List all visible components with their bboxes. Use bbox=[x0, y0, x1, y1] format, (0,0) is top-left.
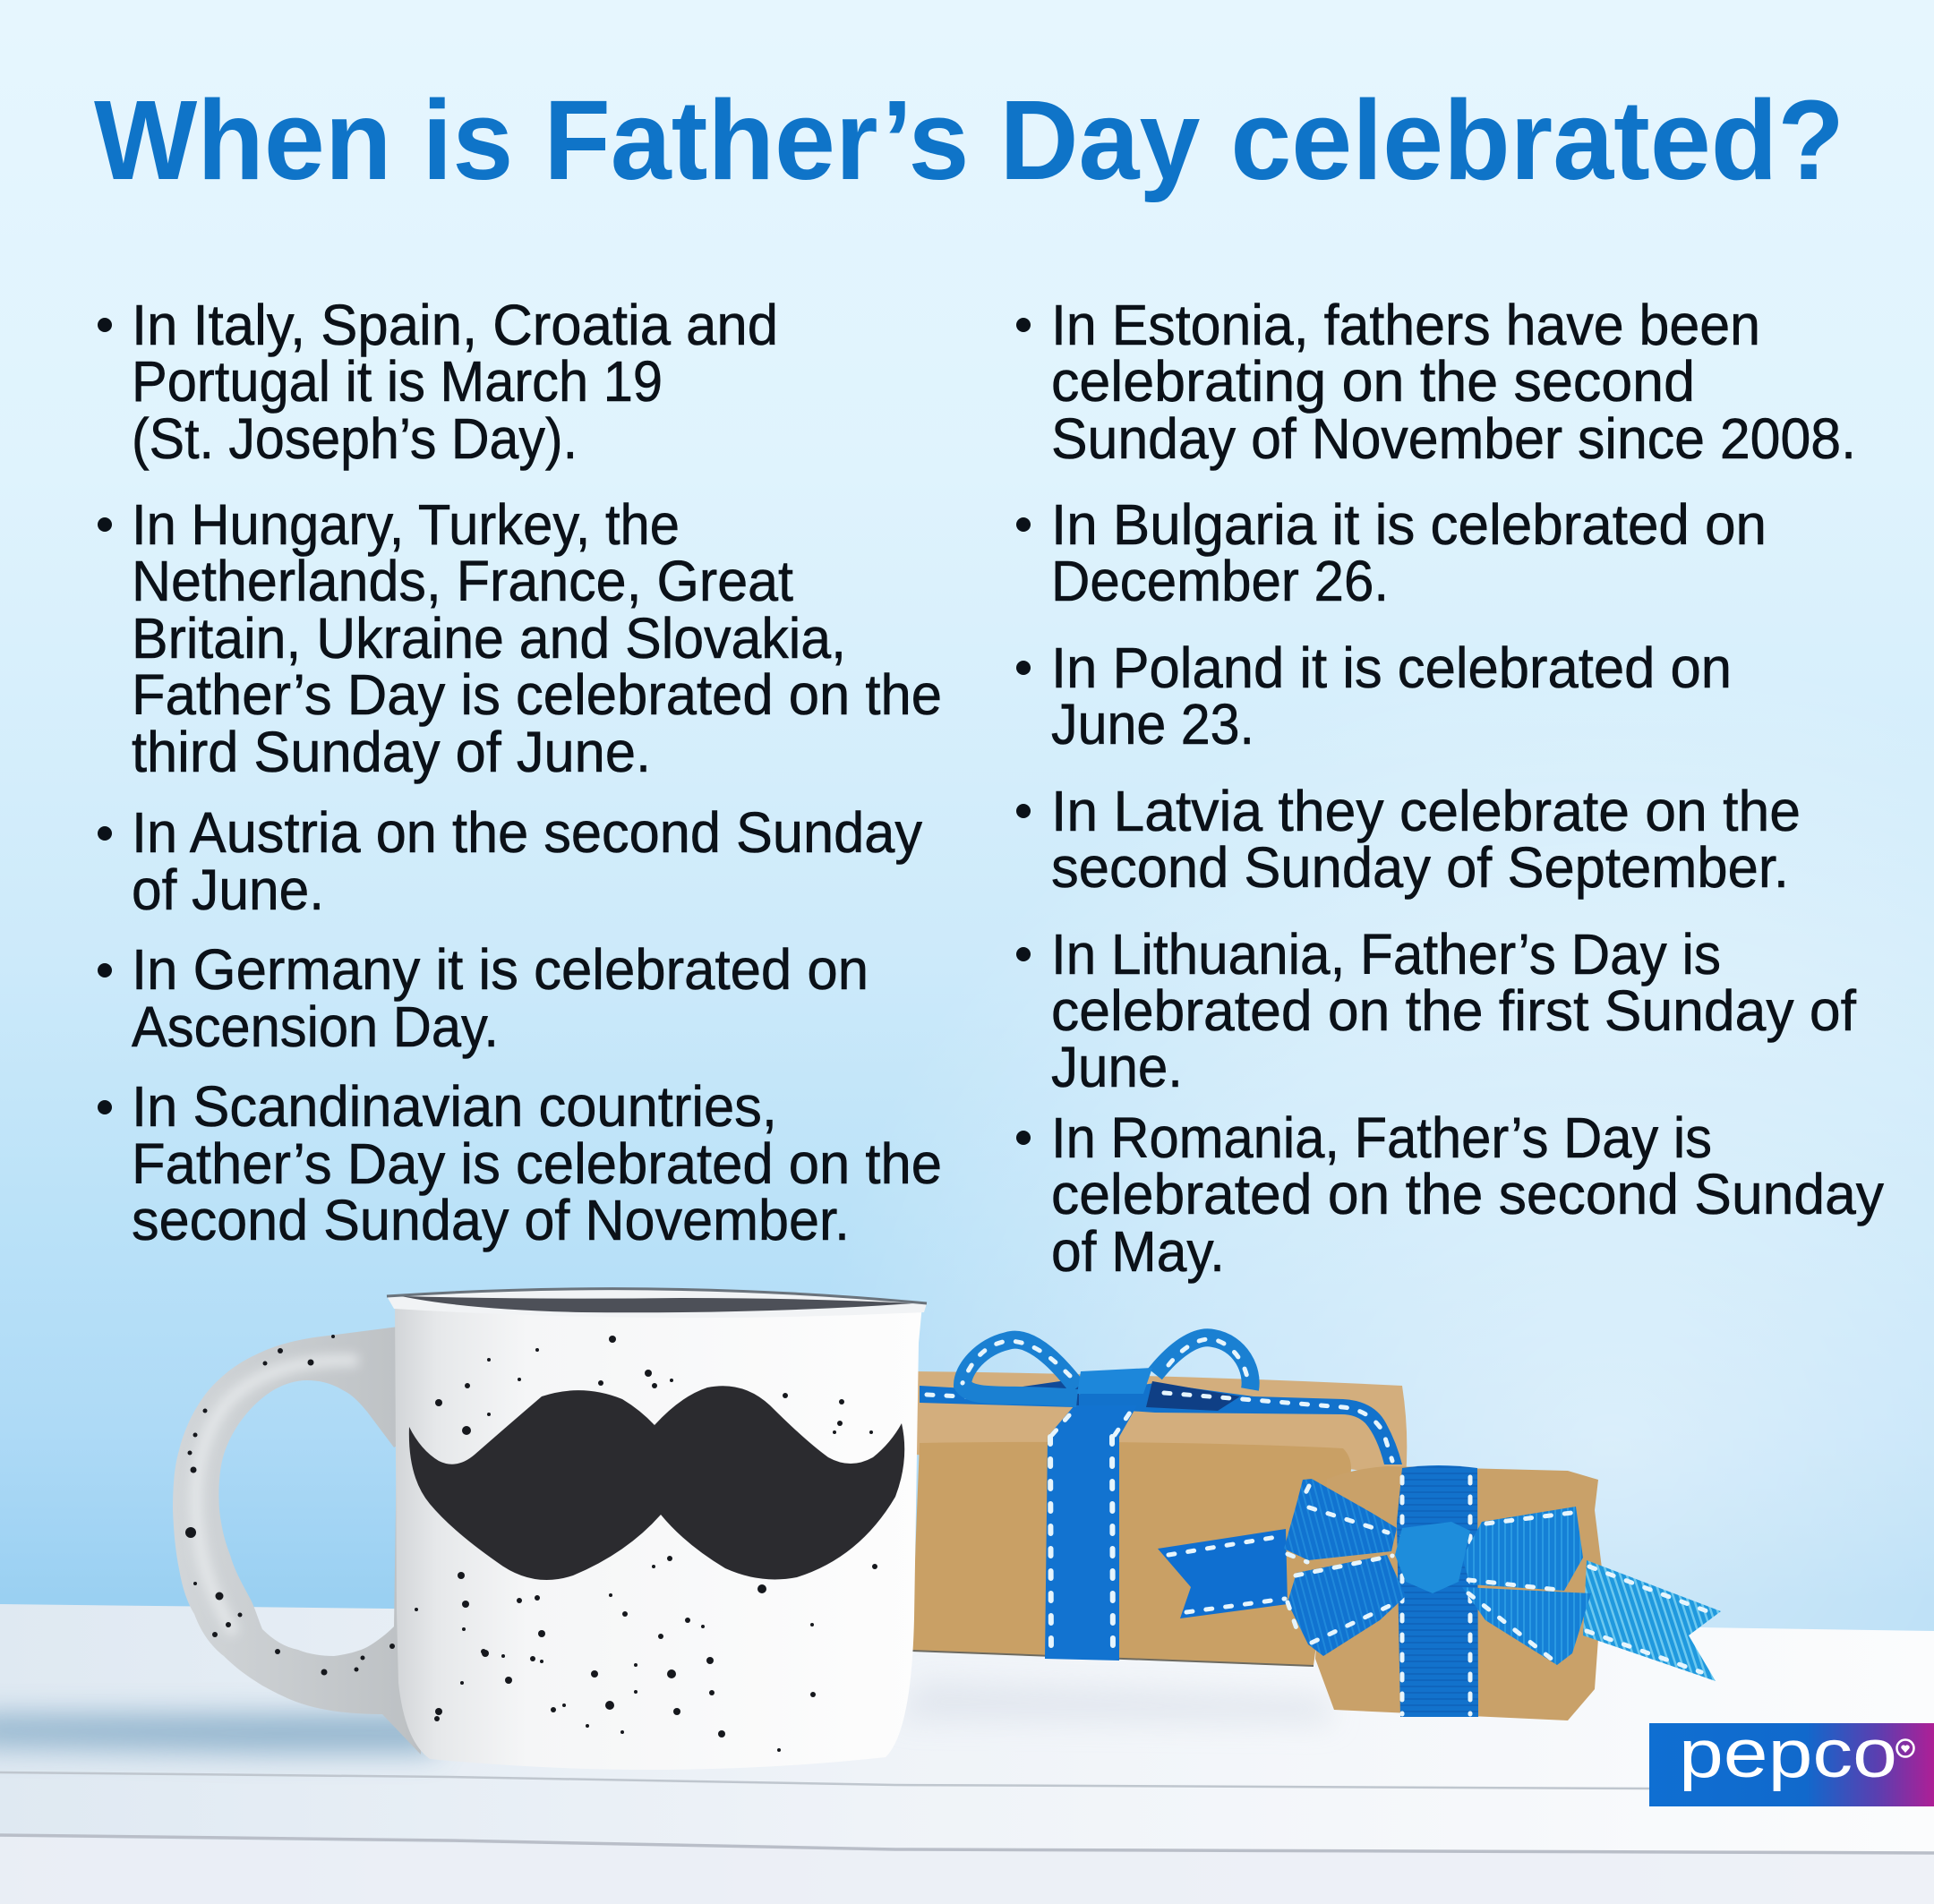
pepco logo bbox=[1649, 1716, 1934, 1806]
item: Austria bbox=[98, 800, 922, 922]
bow left bottom loop bbox=[1288, 1555, 1406, 1656]
item: Italy, Spain, Croatia, Portugal bbox=[98, 293, 778, 471]
title: When is Father’s Day celebrated? bbox=[94, 77, 1844, 203]
item: Germany: Ascension Day. bbox=[132, 995, 499, 1059]
large gift box bbox=[911, 1337, 1407, 1666]
item: Lithuania: celebrated on the first Sunday of bbox=[1051, 978, 1856, 1043]
item: Scandinavian countries: second Sunday of November. bbox=[132, 1188, 850, 1252]
ribbon vertical band bbox=[1045, 1405, 1137, 1661]
mug body bbox=[395, 1298, 922, 1770]
item: Austria: of June. bbox=[132, 858, 324, 922]
item: Scandinavian countries: Father’s Day is celebrated on the bbox=[132, 1131, 942, 1196]
item: Lithuania: June. bbox=[1051, 1035, 1183, 1099]
item: Poland: In Poland it is celebrated on bbox=[1051, 636, 1732, 700]
ribbon band across top bbox=[920, 1383, 1402, 1464]
item: Poland bbox=[1016, 636, 1732, 756]
item: Latvia: second Sunday of September. bbox=[1051, 835, 1789, 900]
item: Poland: June 23. bbox=[1051, 692, 1254, 756]
box top face bbox=[913, 1371, 1407, 1477]
pepco logo: pepco bbox=[1679, 1716, 1897, 1792]
table top bbox=[0, 1604, 1934, 1904]
bow right top loop bbox=[1462, 1507, 1583, 1591]
item: Germany: In Germany it is celebrated on bbox=[132, 937, 869, 1002]
icon: heart in circle bbox=[1896, 1740, 1914, 1756]
bow knot bbox=[1395, 1522, 1470, 1593]
moustache bbox=[409, 1386, 904, 1580]
item: Lithuania: In Lithuania, Father’s Day is bbox=[1051, 922, 1721, 986]
item: Bulgaria bbox=[1016, 492, 1767, 613]
item: Hungary, Turkey and others: Britain, Ukraine and Slovakia, bbox=[132, 606, 846, 670]
bow left top loop bbox=[1284, 1479, 1397, 1560]
item: Romania: of May. bbox=[1051, 1219, 1225, 1284]
item: Romania: celebrated on the second Sunday bbox=[1051, 1162, 1884, 1226]
bow right loop bbox=[1155, 1337, 1251, 1389]
item: Latvia: In Latvia they celebrate on the bbox=[1051, 779, 1801, 843]
box body bbox=[1315, 1466, 1603, 1720]
item: Lithuania bbox=[1016, 922, 1856, 1099]
bow left loop bbox=[963, 1340, 1077, 1398]
item: Hungary, Turkey and others bbox=[98, 492, 942, 784]
coffee mug bbox=[173, 1288, 927, 1770]
small gift box bbox=[1158, 1465, 1721, 1720]
item: Bulgaria: In Bulgaria it is celebrated on bbox=[1051, 492, 1767, 557]
handle highlight bbox=[196, 1361, 358, 1634]
item: Latvia bbox=[1016, 779, 1801, 900]
item: Estonia: celebrating on the second bbox=[1051, 349, 1695, 414]
item: Hungary, Turkey and others: Father’s Day is celebrated on the bbox=[132, 662, 942, 727]
item: Austria: In Austria on the second Sunday bbox=[132, 800, 922, 865]
ribbon vertical band bbox=[1397, 1465, 1478, 1717]
left ribbon tail bbox=[1158, 1529, 1288, 1618]
item: Italy, Spain, Croatia, Portugal: In Italy, Spain, Croatia and bbox=[132, 293, 778, 357]
right column list bbox=[1016, 293, 1884, 1284]
item: Germany bbox=[98, 937, 869, 1059]
mug handle bbox=[173, 1327, 421, 1755]
item: Scandinavian countries: In Scandinavian countries, bbox=[132, 1074, 777, 1139]
mug speckles bbox=[185, 1335, 877, 1752]
bow right bottom loop bbox=[1462, 1587, 1591, 1665]
mug rim bbox=[387, 1288, 927, 1318]
item: Romania bbox=[1016, 1106, 1884, 1284]
item: Hungary, Turkey and others: Netherlands, France, Great bbox=[132, 549, 793, 613]
item: Estonia: Sunday of November since 2008. bbox=[1051, 406, 1856, 471]
item: Bulgaria: December 26. bbox=[1051, 549, 1389, 613]
left column list bbox=[98, 293, 942, 1252]
item: Scandinavian countries bbox=[98, 1074, 942, 1252]
item: Italy, Spain, Croatia, Portugal: Portugal it is March 19 bbox=[132, 349, 663, 414]
item: Estonia bbox=[1016, 293, 1856, 471]
item: Romania: In Romania, Father’s Day is bbox=[1051, 1106, 1712, 1170]
item: Hungary, Turkey and others: In Hungary, Turkey, the bbox=[132, 492, 680, 557]
item: Hungary, Turkey and others: third Sunday of June. bbox=[132, 720, 651, 784]
bow knot bbox=[1077, 1368, 1152, 1394]
right ribbon tail bbox=[1583, 1560, 1721, 1681]
item: Italy, Spain, Croatia, Portugal: (St. Joseph’s Day). bbox=[132, 406, 578, 471]
box front face bbox=[911, 1442, 1351, 1666]
item: Estonia: In Estonia, fathers have been bbox=[1051, 293, 1760, 357]
